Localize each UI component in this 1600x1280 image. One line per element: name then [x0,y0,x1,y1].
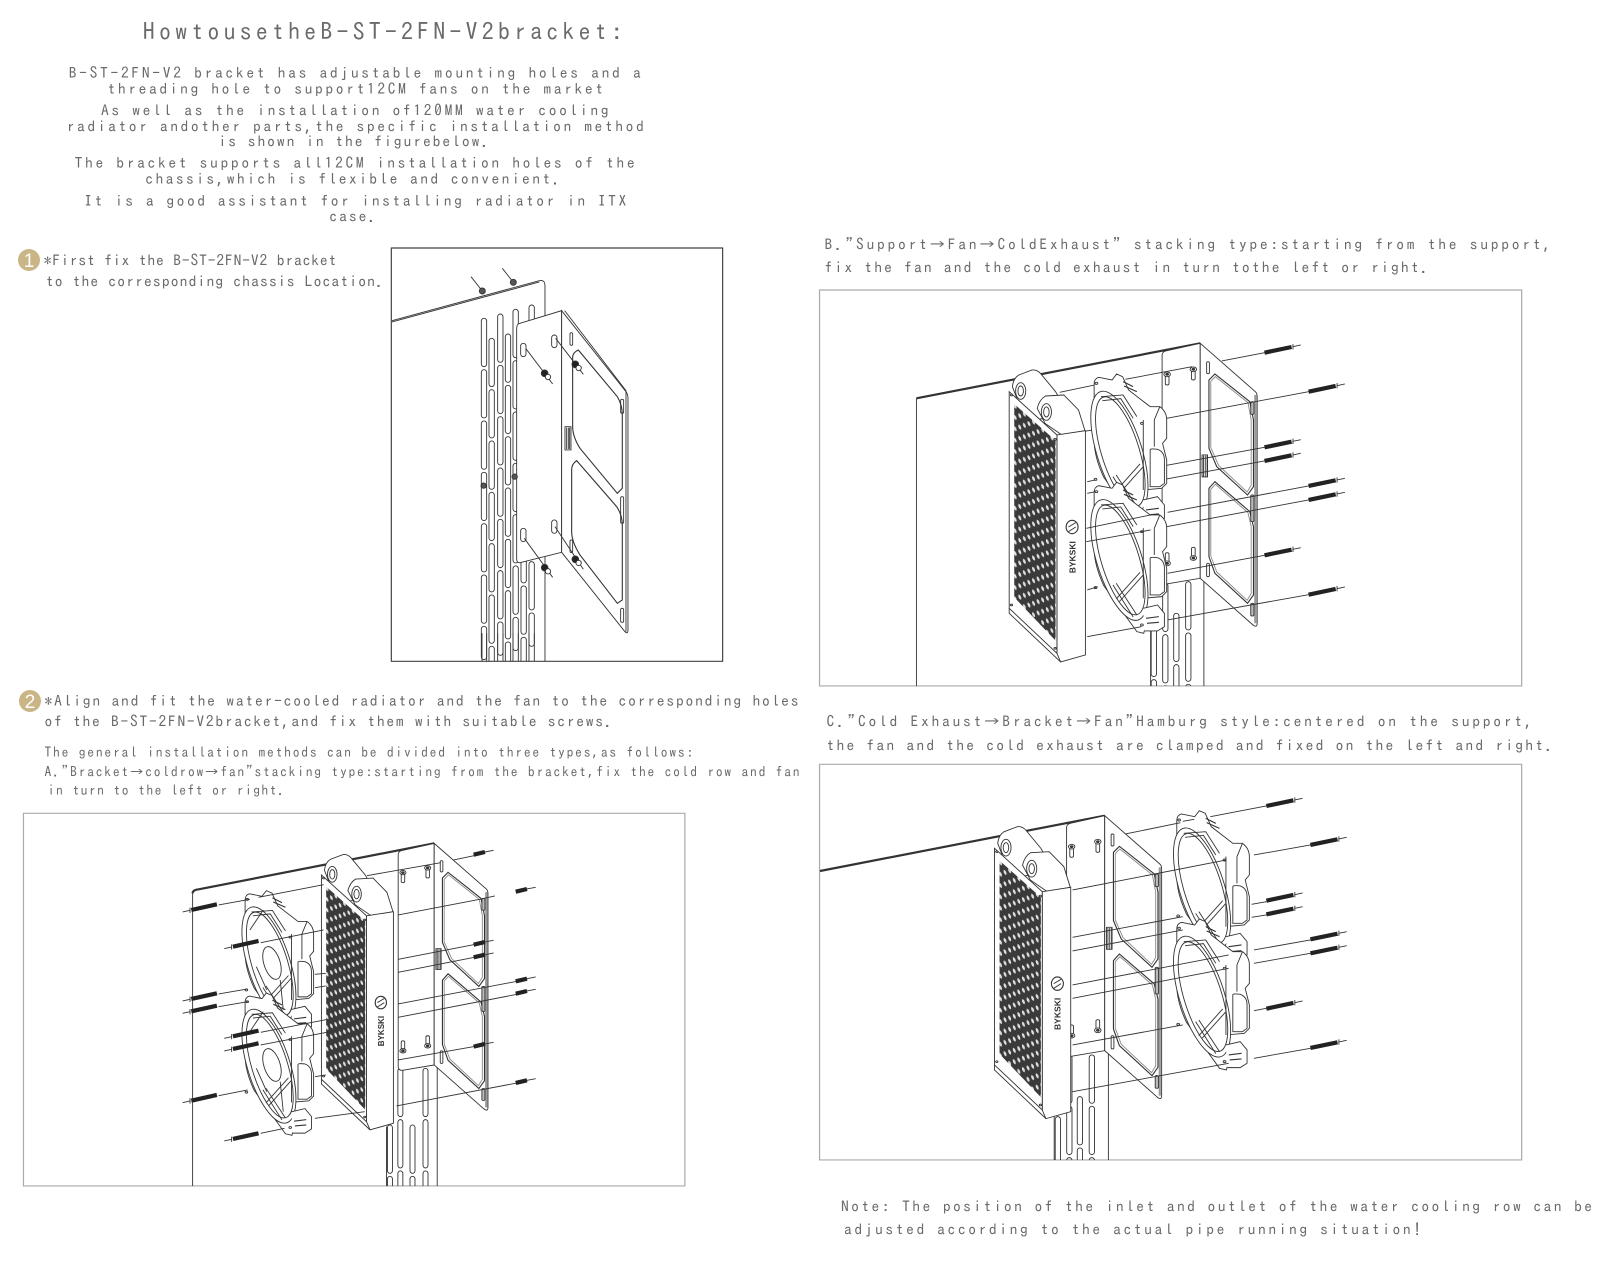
step 2 text: *Align and fit the water-cooled radiator and the fan to the corresponding holes [44,693,798,709]
panel: type C radiator, bracket, fan [818,764,1522,1160]
intro text block: threading hole to support12CM fans on the market [108,81,603,97]
intro text block: is shown in the figurebelow. [218,133,489,149]
panel: type A bracket, radiator, fan [22,812,686,1186]
step 1 badge: 1 [24,251,34,272]
type C text: the fan and the cold exhaust are clamped and fixed on the left and right. [826,737,1553,753]
type C text [826,712,1553,753]
title: HowtousetheB-ST-2FN-V2bracket: [143,19,623,43]
intro text block: As well as the installation of120MM water cooling [101,102,609,118]
step 1 text: to the corresponding chassis Location. [46,273,384,289]
intro text block [67,65,644,224]
type B text: B."Support→Fan→ColdExhaust" stacking type:starting from the support, [824,235,1551,252]
intro text block: B-ST-2FN-V2 bracket has adjustable mounting holes and a [69,65,641,81]
note text [841,1198,1592,1237]
type C text: C."Cold Exhaust→Bracket→Fan"Hamburg style:centered on the support, [826,712,1532,729]
type B text [824,235,1551,275]
step 2 text: A."Bracket→coldrow→fan"stacking type:starting from the bracket,fix the cold row and fan [44,765,800,779]
step 2 text [44,693,800,797]
panel: step 1 bracket on chassis [391,248,723,680]
type B text: fix the fan and the cold exhaust in turn tothe left or right. [824,259,1428,275]
step 1 text [44,252,384,289]
step 1 badge [18,249,40,272]
intro text block: radiator andother parts,the specific installation method [67,118,644,134]
intro text block: case. [329,208,376,224]
step 2 badge [19,690,41,713]
intro text block: It is a good assistant for installing radiator in ITX [84,193,626,209]
note text: adjusted according to the actual pipe running situation! [844,1221,1421,1237]
step 2 badge: 2 [25,692,35,713]
step 1 text: *First fix the B-ST-2FN-V2 bracket [44,252,336,268]
note text: Note: The position of the inlet and outlet of the water cooling row can be [841,1198,1592,1214]
step 2 text: The general installation methods can be divided into three types,as follows: [44,745,693,759]
step 2 text: in turn to the left or right. [48,783,285,797]
intro text block: chassis,which is flexible and convenient. [145,171,560,187]
step 2 text: of the B-ST-2FN-V2bracket,and fix them with suitable screws. [44,713,613,729]
intro text block: The bracket supports all12CM installation holes of the [75,155,635,171]
panel: type B bracket, fan, radiator [818,289,1522,686]
